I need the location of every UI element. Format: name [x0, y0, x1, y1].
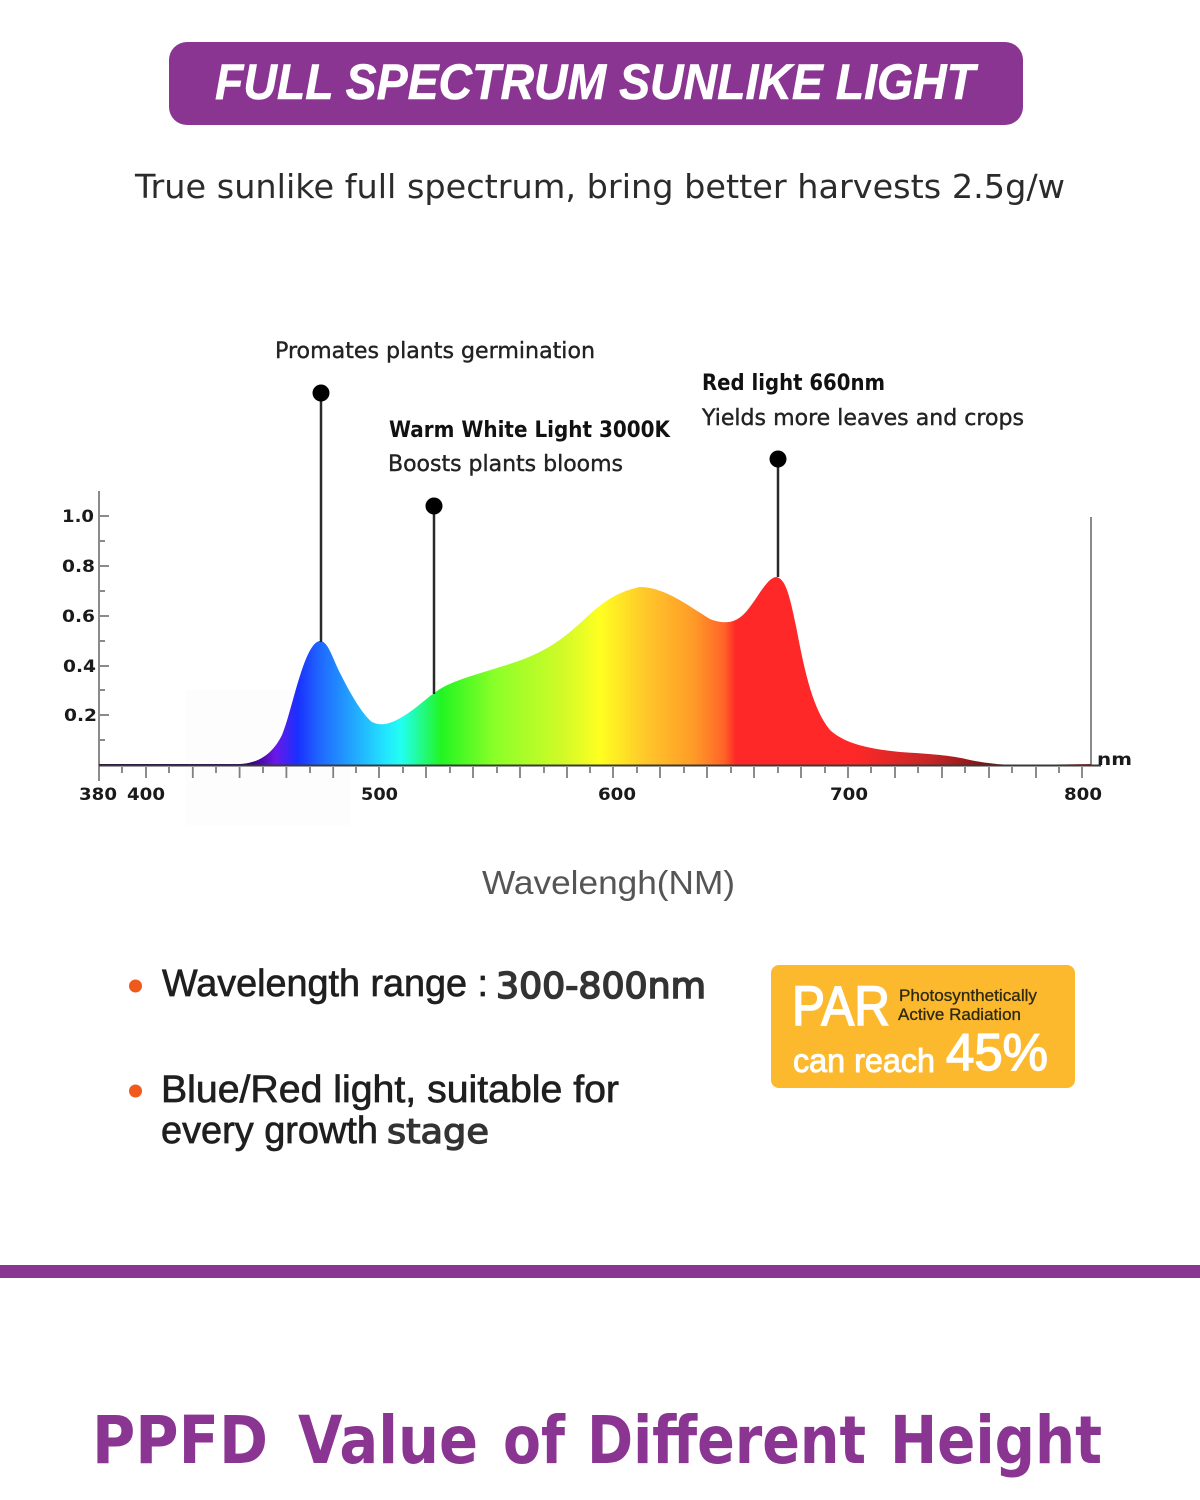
heading: PPFD: Different	[587, 1402, 866, 1479]
bullet: blue red light: Blue/Red light, suitable for	[161, 1069, 619, 1111]
bullet: wavelength range: Wavelength range :	[162, 963, 488, 1005]
x axis labels: 380	[79, 785, 117, 805]
spectrum curve	[99, 577, 1091, 766]
callout: red light: Yields more leaves and crops	[701, 406, 1024, 431]
callout: warm white light: Boosts plants blooms	[388, 452, 623, 477]
bullet: wavelength range: 300-800nm	[496, 966, 706, 1007]
x axis labels: 700	[830, 785, 868, 805]
section divider	[0, 1265, 1200, 1278]
y axis labels: 0.2	[64, 706, 97, 726]
bullet: blue red light: stage	[387, 1112, 489, 1152]
PAR badge: PAR	[792, 974, 890, 1037]
bullet: blue red light: every growth	[161, 1110, 378, 1152]
x axis ticks	[99, 765, 1082, 781]
x axis labels: 400	[127, 785, 165, 805]
x axis labels: 800	[1064, 785, 1102, 805]
title banner	[169, 42, 1023, 125]
y axis labels: 0.6	[62, 607, 95, 627]
y axis labels: 0.8	[62, 557, 95, 577]
x axis labels: 500	[361, 785, 398, 805]
marker: blue peak	[312, 384, 330, 642]
bullet: blue red light	[129, 1069, 619, 1152]
callout: germination: Promates plants germination	[275, 339, 595, 364]
x axis labels: nm	[1097, 750, 1132, 770]
axis title: Wavelengh(NM)	[482, 864, 735, 901]
callout: warm white light	[388, 418, 671, 477]
heading: PPFD: of	[503, 1402, 566, 1479]
PAR badge: 45%	[946, 1024, 1048, 1082]
bullet: wavelength range	[129, 963, 706, 1007]
baseline	[99, 764, 1101, 766]
heading: PPFD: Value	[298, 1402, 478, 1479]
heading: PPFD: PPFD	[92, 1402, 268, 1479]
callout: warm white light: Warm White Light 3000K	[389, 418, 671, 443]
PAR badge	[771, 965, 1075, 1088]
PAR badge: Photosynthetically	[899, 986, 1037, 1005]
marker: red peak	[770, 450, 786, 577]
callout: red light	[701, 371, 1024, 431]
right axis line	[1090, 517, 1092, 765]
y axis labels	[62, 507, 97, 726]
PAR badge: can reach	[793, 1042, 935, 1079]
title banner: FULL SPECTRUM SUNLIKE LIGHT	[215, 54, 979, 110]
y axis labels: 0.4	[63, 657, 96, 677]
heading: PPFD	[92, 1402, 1102, 1479]
x axis labels: 600	[598, 785, 636, 805]
marker: warm white	[426, 498, 442, 694]
spectrum chart	[62, 384, 1132, 825]
subtitle: True sunlike full spectrum, bring better harvests 2.5g/w	[134, 167, 1065, 206]
callout: red light: Red light 660nm	[702, 371, 885, 396]
y axis	[99, 491, 109, 765]
PAR badge: Active Radiation	[898, 1005, 1021, 1024]
y axis labels: 1.0	[62, 507, 94, 527]
heading: PPFD: Height	[890, 1402, 1102, 1479]
x axis labels	[79, 750, 1132, 805]
